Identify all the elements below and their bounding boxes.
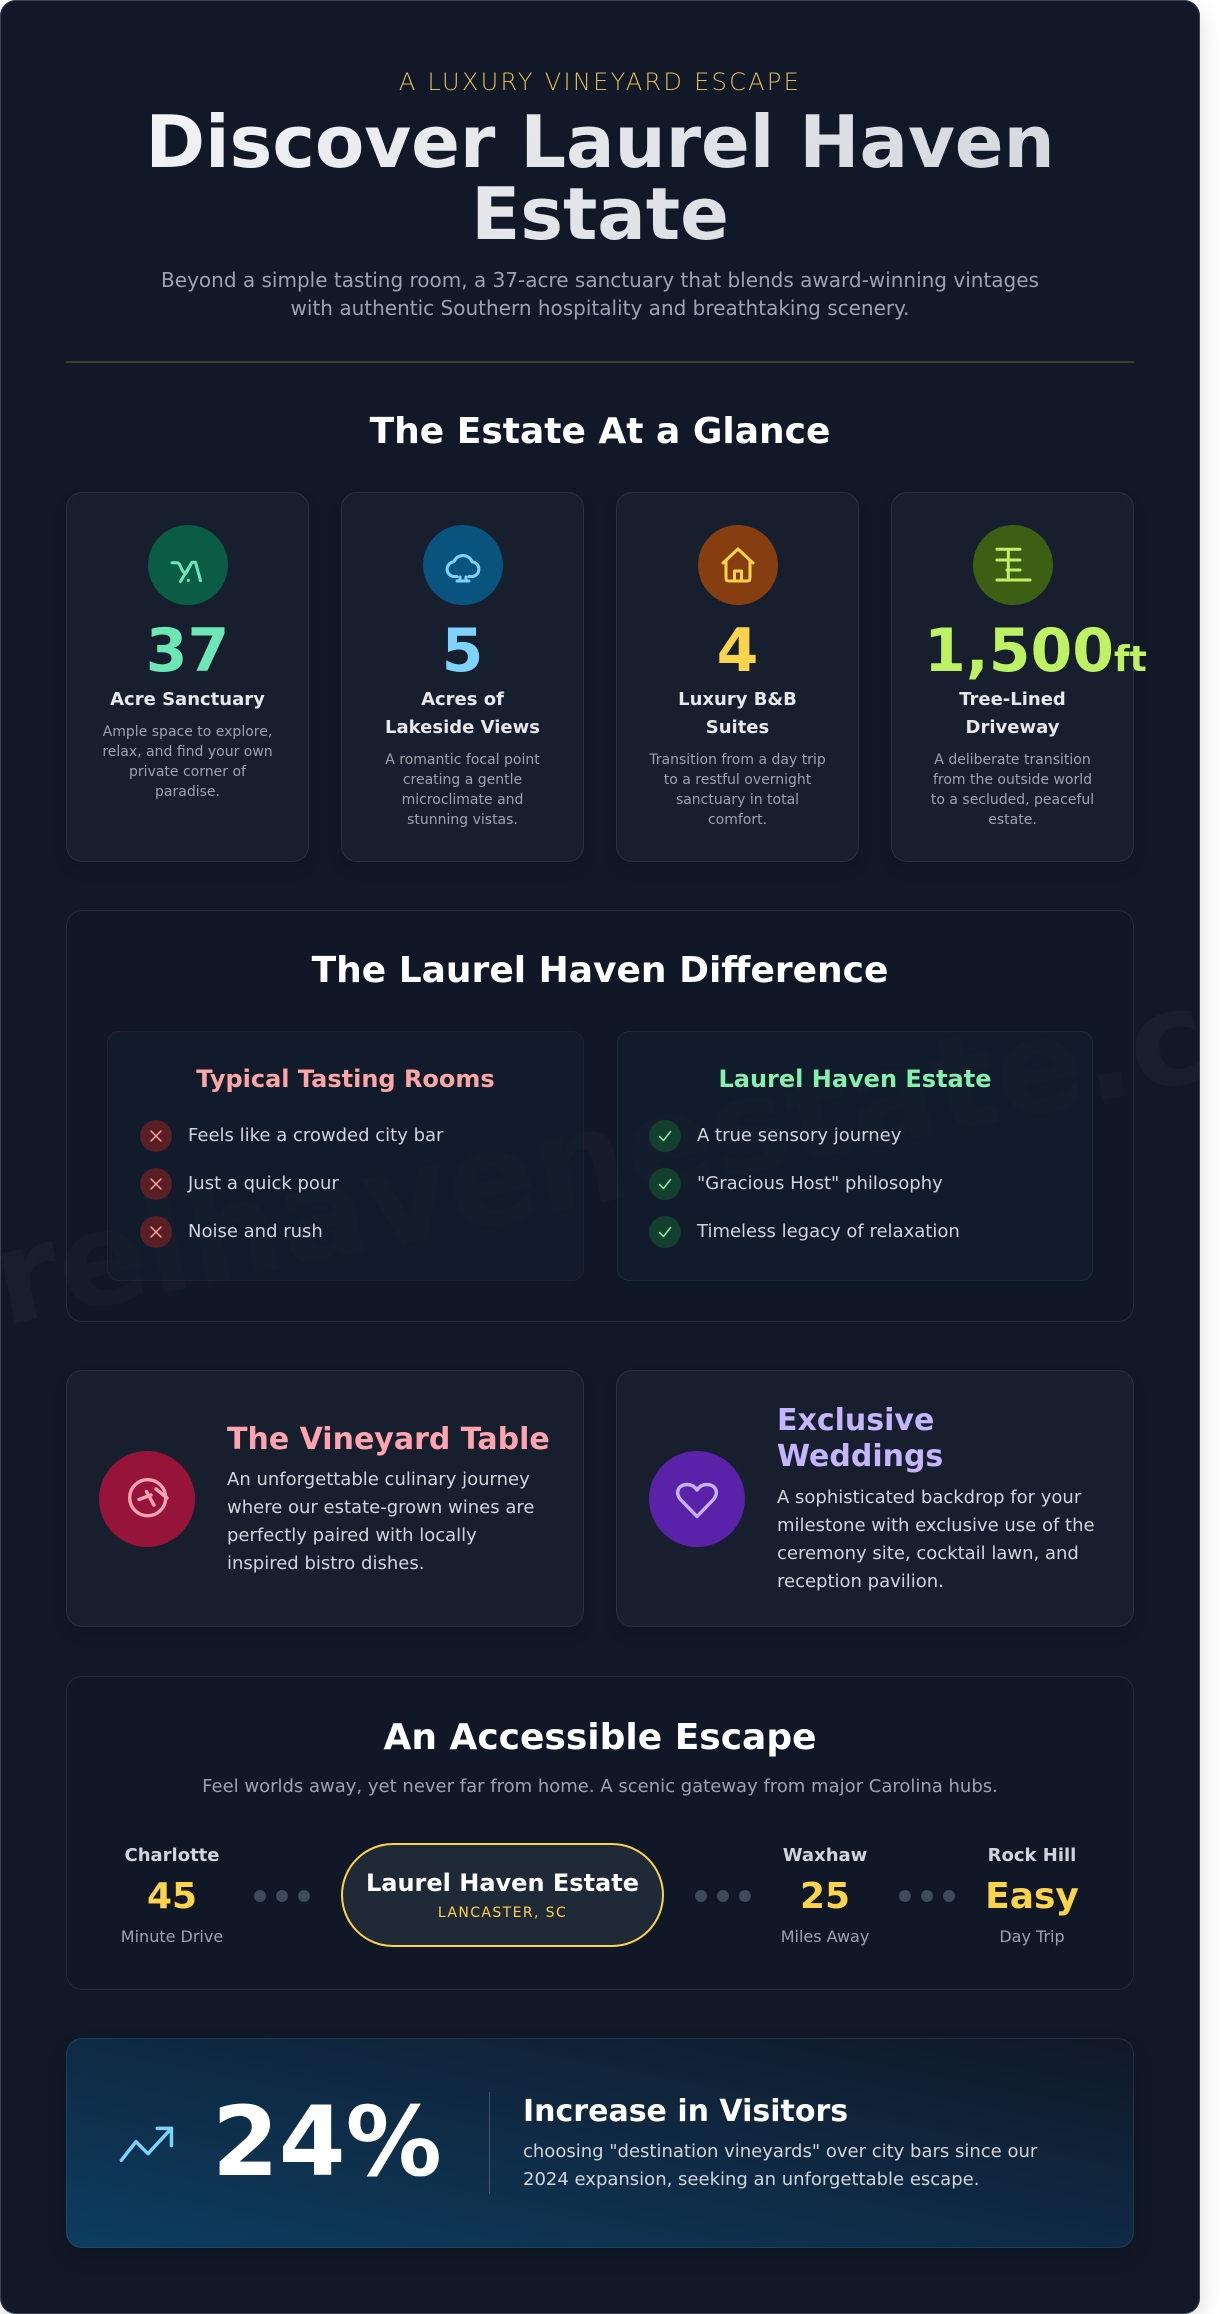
subheading: Laurel Haven Estate <box>718 1065 992 1093</box>
connector dots <box>899 1890 955 1902</box>
icon: house <box>698 525 778 605</box>
panel: the laurel haven difference <box>66 910 1134 1322</box>
heading: The Laurel Haven Difference <box>312 950 888 991</box>
icon: tree cloud <box>423 525 503 605</box>
panel: 24 percent increase banner <box>66 2038 1134 2248</box>
panel: stat 5 acres of lakeside views <box>341 492 584 862</box>
list item: noise and rush <box>140 1216 323 1248</box>
stop: rock hill: Day Trip <box>999 1926 1065 1946</box>
list item: sensory journey: A true sensory journey <box>697 1125 901 1146</box>
panel: stat 37 acre sanctuary <box>66 492 309 862</box>
icon: dining <box>99 1451 195 1547</box>
description: perfectly paired with locally <box>227 1525 477 1546</box>
subheading: Typical Tasting Rooms <box>196 1065 495 1093</box>
description: An unforgettable culinary journey <box>227 1469 530 1490</box>
panel: the vineyard table <box>66 1370 584 1627</box>
number: 37 <box>146 616 229 686</box>
description: microclimate and <box>402 792 523 808</box>
panel: an accessible escape <box>66 1676 1134 1990</box>
description <box>227 1469 534 1574</box>
list item: noise and rush: Noise and rush <box>188 1221 323 1242</box>
description: to a restful overnight <box>664 772 811 788</box>
list item: quick pour: Just a quick pour <box>188 1173 339 1194</box>
description: reception pavilion. <box>777 1571 944 1592</box>
description: ceremony site, cocktail lawn, and <box>777 1543 1079 1564</box>
heading: Weddings <box>777 1439 943 1474</box>
heading: Increase in Visitors <box>523 2094 848 2129</box>
description: milestone with exclusive use of the <box>777 1515 1095 1536</box>
description <box>523 2141 1038 2190</box>
label: Driveway <box>966 717 1059 738</box>
stop: waxhaw: Waxhaw <box>783 1844 867 1866</box>
description: paradise. <box>155 784 220 800</box>
destination pill: Laurel Haven Estate <box>366 1869 639 1897</box>
stop: charlotte: Charlotte <box>124 1844 220 1866</box>
list item: crowded city bar: Feels like a crowded city bar <box>188 1125 443 1146</box>
number: 5 <box>442 616 483 686</box>
panel: stat 4 luxury suites <box>616 492 859 862</box>
description: to a secluded, peaceful <box>931 792 1094 808</box>
destination pill <box>341 1843 664 1947</box>
stop: waxhaw: Miles Away <box>781 1926 869 1946</box>
list item: timeless legacy <box>649 1216 960 1248</box>
subheading: Feel worlds away, yet never far from home. A scenic gateway from major Carolina hubs. <box>202 1776 998 1797</box>
list item: timeless legacy: Timeless legacy of relaxation <box>697 1221 960 1242</box>
subtitle: Beyond a simple tasting room, a 37-acre sanctuary that blends award-winning vintages <box>161 268 1039 292</box>
description: inspired bistro dishes. <box>227 1553 424 1574</box>
description: 2024 expansion, seeking an unforgettable escape. <box>523 2169 979 2190</box>
title: Discover Laurel Haven <box>145 100 1055 184</box>
panel: exclusive weddings <box>616 1370 1134 1627</box>
description <box>777 1487 1095 1592</box>
stop: charlotte: Minute Drive <box>121 1926 223 1946</box>
number: 1,500ft <box>924 616 1147 686</box>
description: A sophisticated backdrop for your <box>777 1487 1081 1508</box>
description: stunning vistas. <box>407 812 518 828</box>
description <box>649 752 826 828</box>
label: Tree-Lined <box>959 689 1066 710</box>
description: private corner of <box>129 764 246 780</box>
description: Transition from a day trip <box>649 752 826 768</box>
stop: rock hill: Easy <box>985 1876 1079 1916</box>
icon: tree-lined drive <box>973 525 1053 605</box>
description: from the outside world <box>933 772 1092 788</box>
connector dots <box>254 1890 310 1902</box>
heading <box>777 1403 943 1474</box>
label <box>678 689 797 738</box>
list item: gracious host: "Gracious Host" philosophy <box>697 1173 943 1194</box>
stop: charlotte <box>121 1844 223 1946</box>
label: Acres of <box>421 689 504 710</box>
connector dots <box>695 1890 751 1902</box>
icon: heart <box>649 1451 745 1547</box>
icon: trending up <box>120 2126 174 2162</box>
subtitle: with authentic Southern hospitality and breathtaking scenery. <box>291 296 909 320</box>
description <box>931 752 1094 828</box>
stop: rock hill: Rock Hill <box>988 1844 1076 1866</box>
title <box>100 107 1100 250</box>
description: comfort. <box>708 812 767 828</box>
heading: An Accessible Escape <box>383 1717 817 1758</box>
label: Acre Sanctuary <box>110 689 265 710</box>
label <box>959 689 1066 738</box>
description: A romantic focal point <box>385 752 540 768</box>
subtitle <box>161 268 1039 320</box>
eyebrow: A LUXURY VINEYARD ESCAPE <box>399 68 801 96</box>
description <box>102 724 273 800</box>
list item: sensory journey <box>649 1120 901 1152</box>
big number: 24% <box>212 2086 442 2198</box>
panel: typical tasting rooms <box>107 1031 584 1281</box>
stop: rock hill <box>985 1844 1079 1946</box>
heading: The Vineyard Table <box>227 1422 550 1457</box>
destination pill: LANCASTER, SC <box>438 1905 567 1921</box>
panel: stat 1500ft driveway <box>891 492 1134 862</box>
label: Luxury B&B <box>678 689 797 710</box>
panel: laurel haven estate <box>617 1031 1093 1281</box>
description: choosing "destination vineyards" over city bars since our <box>523 2141 1037 2162</box>
description: sanctuary in total <box>676 792 799 808</box>
description <box>385 752 540 828</box>
list item: crowded city bar <box>140 1120 444 1152</box>
description: where our estate-grown wines are <box>227 1497 534 1518</box>
label: Suites <box>706 717 769 738</box>
description: Ample space to explore, <box>103 724 272 740</box>
number: 4 <box>717 616 758 686</box>
description: A deliberate transition <box>934 752 1091 768</box>
heading: Exclusive <box>777 1403 934 1438</box>
description: relax, and find your own <box>102 744 273 760</box>
stop: charlotte: 45 <box>147 1876 197 1916</box>
list item: quick pour <box>140 1168 339 1200</box>
heading: the estate at a glance: The Estate At a Glance <box>370 411 830 452</box>
stop: waxhaw: 25 <box>800 1876 850 1916</box>
label: Lakeside Views <box>385 717 540 738</box>
description: creating a gentle <box>403 772 522 788</box>
description: estate. <box>988 812 1037 828</box>
title: Estate <box>471 172 729 256</box>
icon: path <box>148 525 228 605</box>
list item: gracious host <box>649 1168 943 1200</box>
label <box>385 689 540 738</box>
stop: waxhaw <box>781 1844 869 1946</box>
